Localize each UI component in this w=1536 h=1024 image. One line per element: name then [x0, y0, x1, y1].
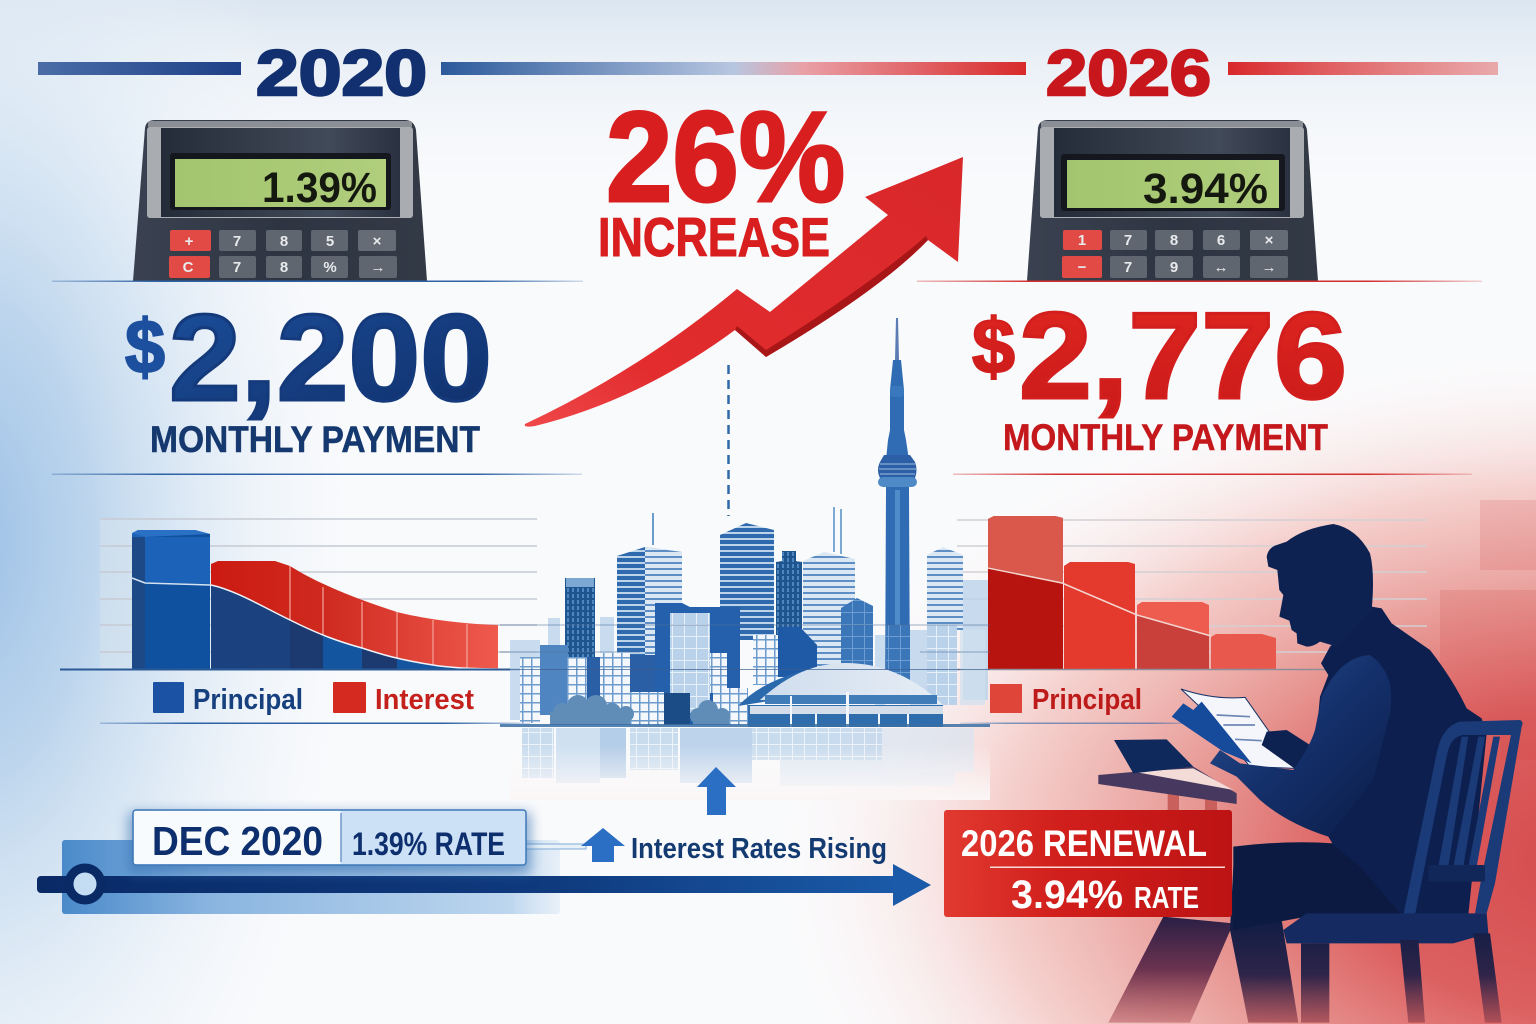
renewal box: 3.94%	[1011, 873, 1123, 917]
CN Tower	[878, 318, 917, 700]
keypad: 1	[1078, 232, 1086, 249]
amount: $2,200: 2,200	[169, 290, 492, 427]
keypad: 8	[280, 233, 288, 250]
label: interest rates rising: Interest Rates Rising	[631, 833, 887, 865]
far and near legs	[1108, 867, 1307, 1023]
tower D	[776, 551, 802, 640]
chart: 2020 payment breakdown	[60, 518, 540, 670]
keypad: −	[1078, 259, 1087, 276]
chart: 2026 payment breakdown	[957, 516, 1427, 670]
skyline: Toronto	[500, 318, 990, 727]
tower E	[803, 507, 855, 670]
table	[1098, 739, 1237, 810]
legend 2020	[153, 682, 474, 716]
connector	[526, 844, 586, 849]
divider under calculator 2026	[917, 280, 1482, 282]
renewal box: 2026 RENEWAL	[961, 823, 1207, 864]
up arrow above timeline	[697, 767, 736, 815]
tower A	[565, 578, 595, 670]
arm and hand	[1210, 655, 1391, 837]
head	[1267, 524, 1373, 647]
principal curve area	[211, 585, 498, 669]
calculator 2026	[1027, 120, 1318, 281]
callout: 26% increase: INCREASE	[598, 206, 830, 268]
calculator reading: 1.39%	[262, 164, 377, 212]
divider	[100, 722, 530, 724]
label: monthly payment 2020: MONTHLY PAYMENT	[150, 419, 480, 460]
icon: small up arrow	[581, 828, 625, 862]
tower C	[720, 523, 774, 640]
divider	[960, 722, 1200, 724]
legend 2020: Principal	[193, 684, 303, 716]
timeline bar	[37, 876, 897, 893]
timeline	[37, 840, 931, 914]
keypad: 5	[326, 233, 334, 250]
keypad: C	[183, 259, 194, 276]
divider	[52, 474, 582, 475]
legend 2020: Interest	[375, 684, 474, 716]
amount: $2,776: $	[972, 302, 1015, 390]
trees	[550, 695, 730, 725]
interest area	[211, 561, 498, 669]
label box: Dec 2020 rate: 1.39% RATE	[352, 826, 505, 862]
man reading document	[1098, 524, 1523, 1023]
bars	[988, 516, 1276, 669]
principal bar	[132, 530, 210, 669]
header timeline bars	[38, 62, 1498, 75]
timeline band	[62, 840, 560, 914]
torso and thigh	[1233, 607, 1487, 930]
reflection of skyline	[510, 728, 990, 800]
keypad: 8	[1170, 232, 1178, 249]
divider	[953, 474, 1472, 475]
divider under calculator 2020	[52, 280, 583, 282]
keypad: 7	[1124, 259, 1132, 276]
keypad: →	[370, 259, 386, 276]
keypad: ×	[373, 233, 382, 250]
legend 2026: Principal	[1032, 684, 1142, 716]
keypad: 6	[1217, 232, 1225, 249]
keypad: 7	[233, 233, 241, 250]
keypad: 9	[1170, 259, 1178, 276]
keypad	[169, 230, 397, 278]
arrow: rising trend	[525, 157, 963, 427]
renewal box	[944, 810, 1232, 917]
chair seat and legs	[1283, 913, 1502, 1023]
heading: 2026: 2026	[1046, 37, 1211, 109]
mid blocks	[520, 603, 985, 725]
stadium dome	[738, 663, 943, 727]
label: monthly payment 2026: MONTHLY PAYMENT	[1003, 417, 1328, 458]
keypad: ↔	[1214, 259, 1228, 276]
doc and folder	[1172, 689, 1310, 770]
keypad: →	[1262, 259, 1276, 276]
tower B	[617, 513, 682, 660]
calculator reading: 3.94%	[1143, 165, 1268, 213]
keypad: 8	[280, 259, 288, 276]
keypad	[1062, 230, 1288, 278]
dashed connector	[727, 365, 730, 516]
grid lines over skyline	[500, 625, 990, 652]
timeline start marker	[69, 868, 101, 900]
tower G	[927, 547, 963, 630]
heading: 2020: 2020	[256, 37, 427, 109]
calculator 2020	[133, 120, 427, 281]
faint city backdrop right	[1440, 500, 1536, 760]
keypad: 7	[233, 259, 241, 276]
callout: 26% increase: 26%	[606, 86, 845, 229]
label box: Dec 2020 rate	[128, 810, 531, 874]
timeline arrow head	[893, 864, 931, 906]
label box: Dec 2020 rate: DEC 2020	[152, 818, 323, 864]
amount: $2,200: $	[125, 305, 165, 390]
keypad: +	[185, 233, 194, 250]
far buildings	[510, 580, 988, 720]
tower F	[841, 598, 873, 668]
keypad: ×	[1265, 232, 1274, 249]
amount: $2,776: 2,776	[1019, 288, 1347, 425]
chair back	[1403, 720, 1523, 915]
renewal box: RATE	[1134, 880, 1199, 915]
keypad: 7	[1124, 232, 1132, 249]
keypad: %	[323, 259, 337, 276]
legend 2026	[990, 684, 1142, 716]
